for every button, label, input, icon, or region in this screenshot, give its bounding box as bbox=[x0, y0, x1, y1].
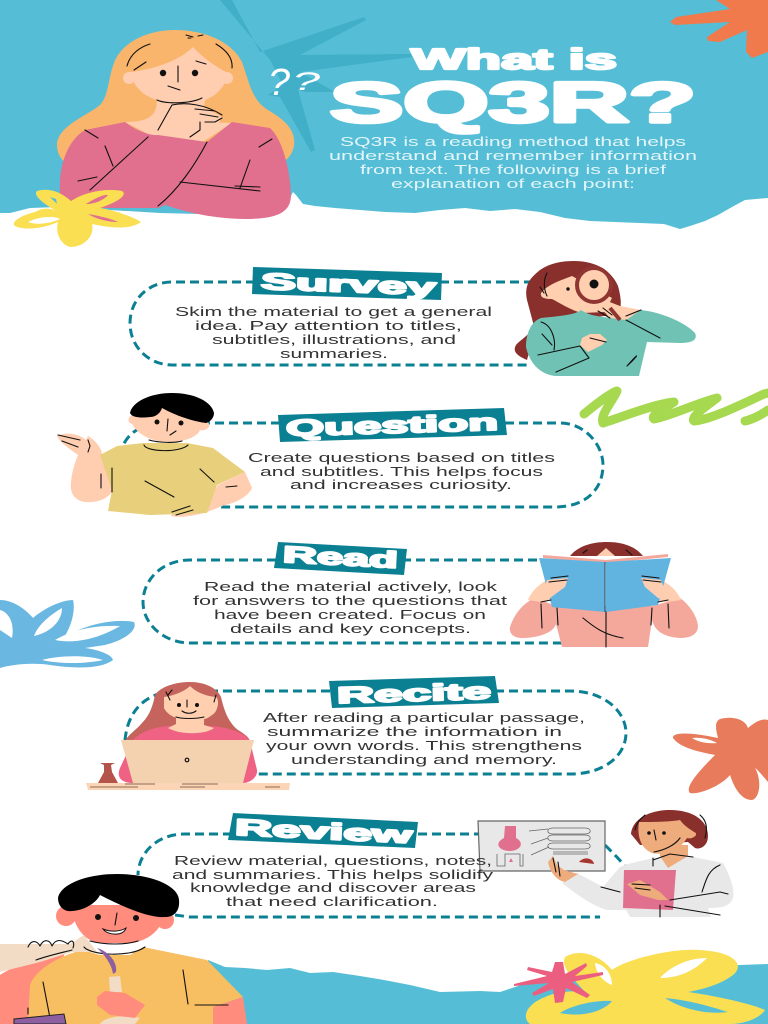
description: Read: for answers to the questions that bbox=[193, 593, 508, 608]
label: Question bbox=[278, 408, 507, 442]
label: Survey bbox=[252, 267, 442, 300]
orange splash top right bbox=[670, 0, 768, 58]
label text: Survey: Survey bbox=[261, 268, 437, 300]
description: Survey bbox=[175, 304, 492, 361]
description: Question: Create questions based on titles bbox=[248, 450, 555, 465]
description: Survey: summaries. bbox=[280, 346, 388, 361]
question marks: ? bbox=[268, 62, 291, 104]
dashed outline: Read bbox=[143, 560, 565, 643]
illustration: thinking woman bbox=[57, 30, 294, 219]
decorative orange flower bbox=[673, 718, 768, 800]
intro text: explanation of each point: bbox=[391, 176, 635, 191]
decorative blue flower bbox=[0, 600, 135, 668]
step: Question bbox=[57, 393, 603, 517]
label text: Review: Review bbox=[234, 814, 413, 848]
description: Recite bbox=[263, 710, 585, 767]
step: Survey bbox=[130, 261, 696, 376]
description: Survey: idea. Pay attention to titles, bbox=[195, 318, 462, 333]
description: Read: details and key concepts. bbox=[230, 621, 471, 636]
label text: Read: Read bbox=[282, 541, 399, 573]
label: Review bbox=[228, 813, 418, 848]
decorative yellow flower bottom right bbox=[526, 950, 765, 1024]
heading: What is: What is bbox=[411, 44, 617, 76]
illustration: woman with magnifier bbox=[515, 261, 696, 376]
dashed outline: Recite bbox=[125, 691, 626, 774]
description: Question: and subtitles. This helps focus bbox=[260, 464, 543, 479]
label: Read bbox=[274, 542, 407, 575]
description: Read: have been created. Focus on bbox=[214, 607, 486, 622]
illustration: person reading bbox=[510, 542, 698, 647]
decorative star behind title bbox=[220, 0, 412, 152]
illustration: woman presenting board bbox=[478, 810, 733, 917]
bottom background bbox=[208, 960, 768, 1024]
question marks bbox=[268, 62, 320, 104]
label text: Recite: Recite bbox=[337, 678, 491, 708]
label text: Question: Question bbox=[286, 409, 498, 441]
decorative yellow flower top left bbox=[14, 190, 141, 247]
description: Read bbox=[193, 579, 508, 636]
heading: SQ3R?: SQ3R? bbox=[330, 71, 696, 135]
intro text: from text. The following is a brief bbox=[360, 162, 667, 177]
dashed outline: Review bbox=[138, 834, 628, 917]
step: Read bbox=[143, 541, 698, 647]
header background bbox=[0, 0, 768, 229]
description: Question: and increases curiosity. bbox=[290, 477, 512, 492]
description: Recite: understanding and memory. bbox=[291, 752, 557, 767]
decorative green squiggle bbox=[584, 391, 768, 423]
label: Recite bbox=[329, 676, 499, 708]
description: Recite: After reading a particular passage, bbox=[263, 710, 585, 725]
illustration: confused boy bbox=[57, 393, 252, 517]
illustration: woman at laptop bbox=[86, 682, 290, 790]
dashed outline: Survey bbox=[130, 282, 530, 365]
intro text: understand and remember information bbox=[329, 148, 697, 163]
intro text bbox=[329, 134, 697, 191]
description: Review: knowledge and discover areas bbox=[190, 880, 476, 895]
step: Recite bbox=[86, 676, 626, 790]
description: Read: Read the material actively, look bbox=[204, 579, 498, 594]
description: Review: and summaries. This helps solidify bbox=[172, 867, 494, 882]
description: Question bbox=[248, 450, 555, 492]
dashed outline: Question bbox=[118, 423, 603, 507]
decorative pink star bbox=[514, 962, 603, 1003]
description: Survey: subtitles, illustrations, and bbox=[212, 332, 456, 347]
description: Review: Review material, questions, notes, bbox=[174, 853, 492, 868]
question marks: ? bbox=[292, 68, 320, 96]
description: Recite: summarize the information in bbox=[267, 724, 562, 739]
step: Review bbox=[138, 810, 733, 917]
description: Survey: Skim the material to get a general bbox=[175, 304, 492, 319]
description: Review bbox=[172, 853, 494, 909]
illustration: smiling boy with test tube bbox=[0, 874, 247, 1024]
description: Recite: your own words. This strengthens bbox=[266, 738, 582, 753]
description: Review: that need clarification. bbox=[226, 894, 438, 909]
intro text: SQ3R is a reading method that helps bbox=[340, 134, 686, 149]
